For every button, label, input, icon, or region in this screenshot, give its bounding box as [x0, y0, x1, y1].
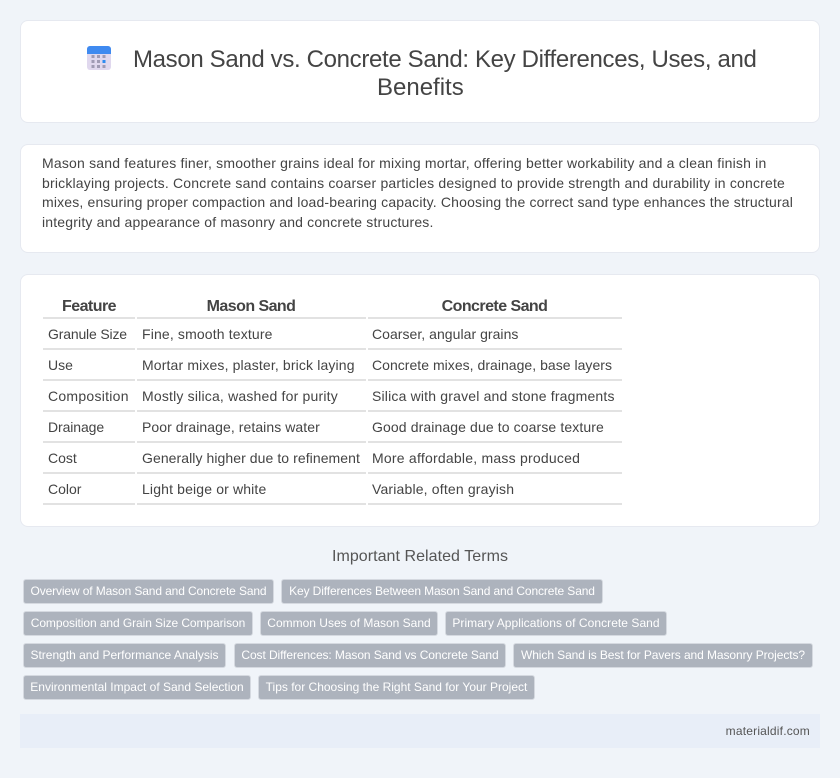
related term tags: Composition and Grain Size Comparison: [31, 616, 245, 630]
comparison table: Mason Sand: [207, 298, 295, 315]
title: Mason Sand vs. Concrete Sand: Key Differences, Uses, and: [133, 46, 757, 73]
comparison table: More affordable, mass produced: [372, 450, 580, 466]
intro paragraph: [42, 155, 793, 230]
related term tags: Which Sand is Best for Pavers and Masonry Projects?: [521, 648, 805, 662]
comparison table: Color: [48, 481, 81, 497]
panel: intro: [20, 144, 820, 253]
comparison table: Coarser, angular grains: [372, 326, 518, 342]
related term tags: Strength and Performance Analysis: [30, 648, 219, 662]
related term tags: Primary Applications of Concrete Sand: [452, 616, 660, 630]
icon: calendar: [87, 46, 111, 70]
related term tags: Common Uses of Mason Sand: [267, 616, 431, 630]
comparison table: Generally higher due to refinement: [142, 450, 360, 466]
comparison table: Silica with gravel and stone fragments: [372, 388, 615, 404]
related term tags: Key Differences Between Mason Sand and Concrete Sand: [289, 584, 595, 598]
comparison table: Good drainage due to coarse texture: [372, 419, 604, 435]
comparison table: Cost: [48, 450, 77, 466]
intro paragraph: Mason sand features finer, smoother grains ideal for mixing mortar, offering better workability and a clean finish in: [42, 155, 766, 171]
intro paragraph: integrity and appearance of masonry and concrete structures.: [42, 214, 434, 230]
comparison table: Concrete mixes, drainage, base layers: [372, 357, 612, 373]
heading: related terms: Important Related Terms: [332, 548, 508, 565]
related term tags: Overview of Mason Sand and Concrete Sand: [30, 584, 266, 598]
related term tags: Environmental Impact of Sand Selection: [30, 680, 244, 694]
title: Benefits: [377, 74, 464, 101]
footer source text: materialdif.com: [726, 724, 810, 738]
panel: header: [20, 20, 820, 123]
panel: comparison table: [20, 274, 820, 527]
comparison table: Composition: [48, 388, 129, 404]
title: [133, 46, 757, 101]
comparison table: Drainage: [48, 419, 104, 435]
intro paragraph: bricklaying projects. Concrete sand contains coarser particles designed to provide strength and durability in concrete: [42, 175, 785, 191]
comparison table: Poor drainage, retains water: [142, 419, 320, 435]
comparison table: Mortar mixes, plaster, brick laying: [142, 357, 355, 373]
related term tags: Tips for Choosing the Right Sand for Your Project: [266, 680, 527, 694]
intro paragraph: mixes, ensuring proper compaction and load-bearing capacity. Choosing the correct sand type enhances the structural: [42, 194, 793, 210]
comparison table: Concrete Sand: [442, 298, 547, 315]
comparison table: Variable, often grayish: [372, 481, 514, 497]
comparison table: [43, 298, 622, 505]
related term tags: [23, 579, 813, 700]
comparison table: Fine, smooth texture: [142, 326, 273, 342]
comparison table: Feature: [62, 298, 116, 315]
comparison table: Granule Size: [48, 326, 127, 342]
comparison table: Use: [48, 357, 73, 373]
comparison table: Mostly silica, washed for purity: [142, 388, 338, 404]
comparison table: Light beige or white: [142, 481, 266, 497]
related term tags: Cost Differences: Mason Sand vs Concrete Sand: [241, 648, 499, 662]
footer bar: [20, 714, 820, 748]
